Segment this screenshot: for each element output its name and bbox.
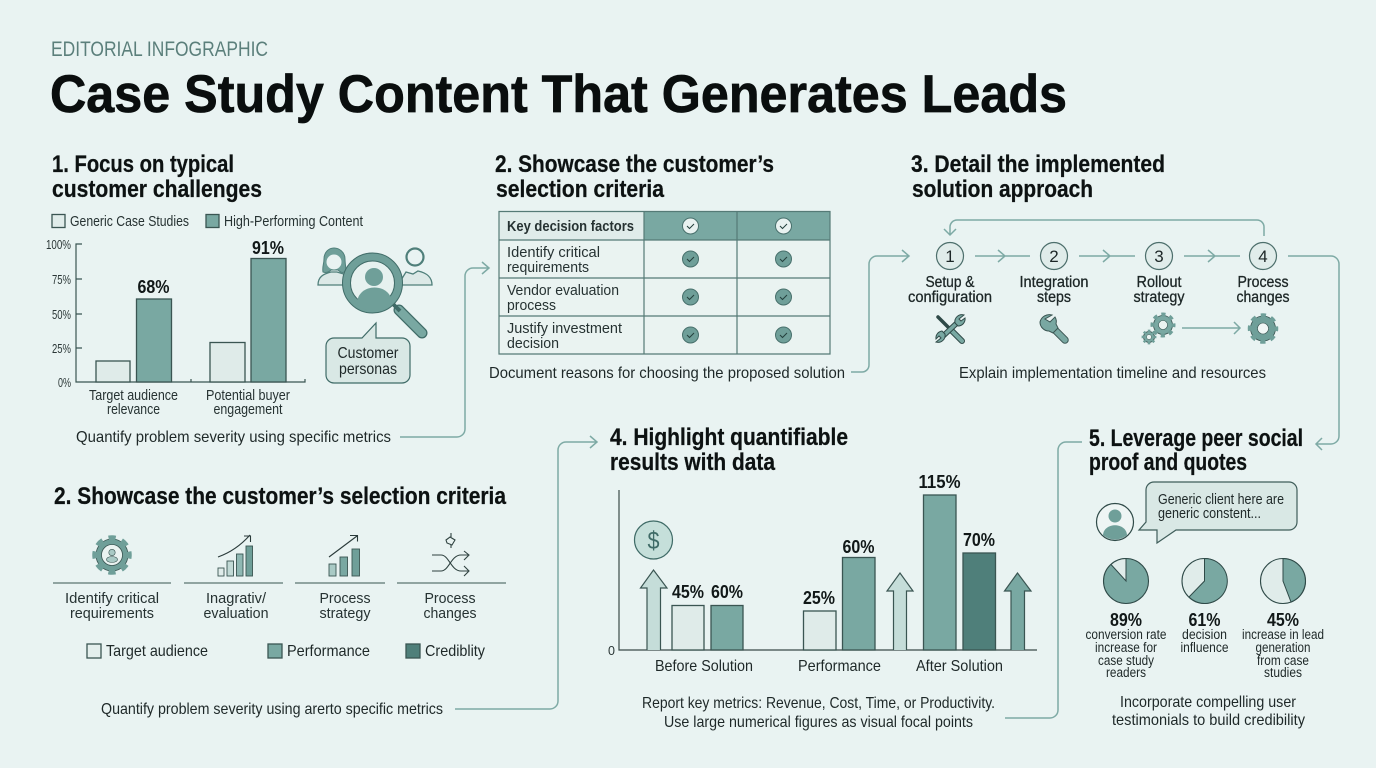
results bar chart: 60% <box>842 536 874 557</box>
heading 1: 1. Focus on typical <box>52 151 234 178</box>
heading 1: customer challenges <box>52 176 262 203</box>
pie chart 89% <box>1104 558 1148 604</box>
heading 1 <box>52 151 262 203</box>
legend: Generic Case Studies <box>70 213 189 230</box>
step flow <box>908 242 1290 306</box>
stat 89% <box>1086 609 1166 680</box>
decision table: requirements <box>507 259 589 276</box>
heading 2 <box>495 151 774 203</box>
results bar chart: Performance <box>798 658 881 675</box>
stat 45% <box>1242 609 1324 680</box>
heading 5: 5. Leverage peer social <box>1089 425 1303 452</box>
caption 4 <box>642 695 995 731</box>
decision table <box>499 212 830 354</box>
bar chart: relevance <box>107 401 160 418</box>
step flow: steps <box>1037 289 1071 306</box>
icon: gear <box>1250 316 1276 342</box>
bar chart: engagement <box>214 401 283 418</box>
icon: tools <box>936 315 965 342</box>
icon: gears <box>1143 314 1174 343</box>
step flow: Rollout <box>1136 274 1182 291</box>
caption 4: Report key metrics: Revenue, Cost, Time, or Productivity. <box>642 695 995 712</box>
stat 45%: from case <box>1257 653 1309 668</box>
heading 2: 2. Showcase the customer’s <box>495 151 774 178</box>
arrow: gears to gear <box>1182 322 1240 334</box>
arrow: up 2 <box>887 573 913 650</box>
stat 45%: studies <box>1264 665 1302 680</box>
bar chart: 68% <box>138 276 170 297</box>
icon: customer personas magnifier <box>318 248 432 383</box>
arrow: up 3 <box>1004 573 1031 650</box>
caption 5 <box>1112 694 1305 729</box>
bar chart: Target audience <box>89 387 178 404</box>
icon: growth bars <box>329 536 360 576</box>
dividers and labels: strategy <box>320 605 371 622</box>
step flow: strategy <box>1134 289 1184 306</box>
icon: avatar <box>1096 504 1134 540</box>
results bar chart: 45% <box>672 581 704 602</box>
decision table: process <box>507 297 556 314</box>
dividers and labels: Process <box>320 590 370 607</box>
heading 4: 4. Highlight quantifiable <box>610 424 848 451</box>
step flow: Integration <box>1020 274 1088 291</box>
step flow: Setup & <box>926 274 975 291</box>
results bar chart: 0 <box>608 644 615 658</box>
stat 61%: influence <box>1180 640 1228 655</box>
stat 45%: 45% <box>1267 609 1299 630</box>
icon: rising bars <box>218 535 252 576</box>
bar chart <box>46 237 305 418</box>
legend <box>52 213 364 230</box>
results bar chart: 70% <box>963 529 995 550</box>
step flow: 3 <box>1154 247 1164 266</box>
stat 89%: case study <box>1098 653 1154 668</box>
bar chart: 75% <box>52 273 71 287</box>
pie chart 45% <box>1260 558 1306 604</box>
heading lower 2: 2. Showcase the customer’s selection criteria <box>54 483 507 510</box>
bar chart: 91% <box>252 237 284 258</box>
legend lower <box>87 643 485 660</box>
dividers and labels: Identify critical <box>65 590 159 607</box>
arrow: section 1 to 2 <box>400 262 489 437</box>
loop arrow <box>944 220 1264 236</box>
dividers and labels: evaluation <box>204 605 268 622</box>
results bar chart <box>608 471 1037 675</box>
heading 4 <box>610 424 848 476</box>
bar chart: Potential buyer <box>206 387 290 404</box>
dividers and labels: changes <box>424 605 476 622</box>
step flow: configuration <box>908 289 992 306</box>
heading 3 <box>911 151 1165 203</box>
panel: 4 quantifiable results <box>608 424 1037 731</box>
panel: 1 focus on challenges <box>46 151 432 446</box>
quote bubble: Generic client here are <box>1158 492 1284 508</box>
heading 5: proof and quotes <box>1089 449 1247 476</box>
stat 61% <box>1180 609 1228 655</box>
caption 5: Incorporate compelling user <box>1120 694 1297 711</box>
step flow: Process <box>1238 274 1288 291</box>
bar chart: 50% <box>52 308 71 322</box>
step flow: changes <box>1236 289 1290 306</box>
legend lower: Crediblity <box>425 643 485 660</box>
icon: dollar coin <box>634 521 672 559</box>
decision table: Vendor evaluation <box>507 282 619 299</box>
heading 3: 3. Detail the implemented <box>911 151 1165 178</box>
heading 5 <box>1089 425 1303 476</box>
bar chart: 25% <box>52 342 71 356</box>
stat 61%: decision <box>1182 627 1227 642</box>
quote bubble: generic constent... <box>1158 506 1261 522</box>
stat 45%: generation <box>1256 640 1310 655</box>
quote bubble <box>1139 482 1297 543</box>
step flow: 2 <box>1049 247 1059 266</box>
bar chart: 0% <box>58 376 71 390</box>
dividers and labels: requirements <box>70 605 154 622</box>
dividers and labels: Inagrativ/ <box>206 590 267 607</box>
icon: dollar coin: $ <box>648 527 660 555</box>
decision table: decision <box>507 335 559 352</box>
stat 45%: increase in lead <box>1242 627 1324 642</box>
results bar chart: After Solution <box>916 658 1003 675</box>
step flow: 4 <box>1258 247 1268 266</box>
icon: customer personas magnifier: Customer <box>338 345 399 362</box>
arrow: section 2 to 3 <box>851 250 909 372</box>
caption 2: Document reasons for choosing the proposed solution <box>489 365 845 382</box>
bar chart: 100% <box>46 238 71 252</box>
eyebrow label: EDITORIAL INFOGRAPHIC <box>51 38 268 61</box>
arrow: section 3 to 5 <box>1288 256 1339 450</box>
legend lower: Performance <box>287 643 370 660</box>
panel: 3 solution approach <box>908 151 1290 382</box>
caption lower 2: Quantify problem severity using arerto specific metrics <box>101 701 443 718</box>
step flow: 1 <box>945 247 955 266</box>
panel: 2 selection criteria table <box>489 151 845 382</box>
caption 4: Use large numerical figures as visual focal points <box>664 714 973 731</box>
heading 2: selection criteria <box>496 176 665 203</box>
icon: shuffle arrows <box>432 533 469 576</box>
results bar chart: 25% <box>803 587 835 608</box>
caption 3: Explain implementation timeline and resources <box>959 365 1266 382</box>
arrow: up 1 <box>640 570 667 650</box>
panel: 5 social proof <box>1086 425 1324 729</box>
arrow: lower 2 to 4 <box>455 436 597 709</box>
stat 89%: 89% <box>1110 609 1142 630</box>
results bar chart: Before Solution <box>655 658 753 675</box>
icon: person gear <box>95 538 129 572</box>
caption 5: testimonials to build credibility <box>1112 712 1305 729</box>
dividers and labels <box>53 583 506 622</box>
results bar chart: 60% <box>711 581 743 602</box>
icon: customer personas magnifier: personas <box>339 361 397 378</box>
legend lower: Target audience <box>106 643 208 660</box>
stat 89%: readers <box>1106 665 1146 680</box>
decision table: Key decision factors <box>507 218 634 235</box>
dividers and labels: Process <box>424 590 476 607</box>
stat 89%: conversion rate <box>1086 627 1166 642</box>
pie chart 61% <box>1182 558 1227 604</box>
decision table: Justify investment <box>507 320 623 337</box>
arrow: section 4 to 5 <box>1005 442 1082 718</box>
panel: lower 2 selection criteria <box>53 483 507 718</box>
title: Case Study Content That Generates Leads <box>50 65 1067 124</box>
results bar chart: 115% <box>918 471 960 492</box>
heading 3: solution approach <box>912 176 1093 203</box>
heading 4: results with data <box>610 449 776 476</box>
stat 61%: 61% <box>1188 609 1220 630</box>
legend: High-Performing Content <box>224 213 364 230</box>
decision table: Identify critical <box>507 244 600 261</box>
icon: wrench <box>1040 315 1065 340</box>
caption 1: Quantify problem severity using specific metrics <box>76 429 391 446</box>
stat 89%: increase for <box>1095 640 1157 655</box>
